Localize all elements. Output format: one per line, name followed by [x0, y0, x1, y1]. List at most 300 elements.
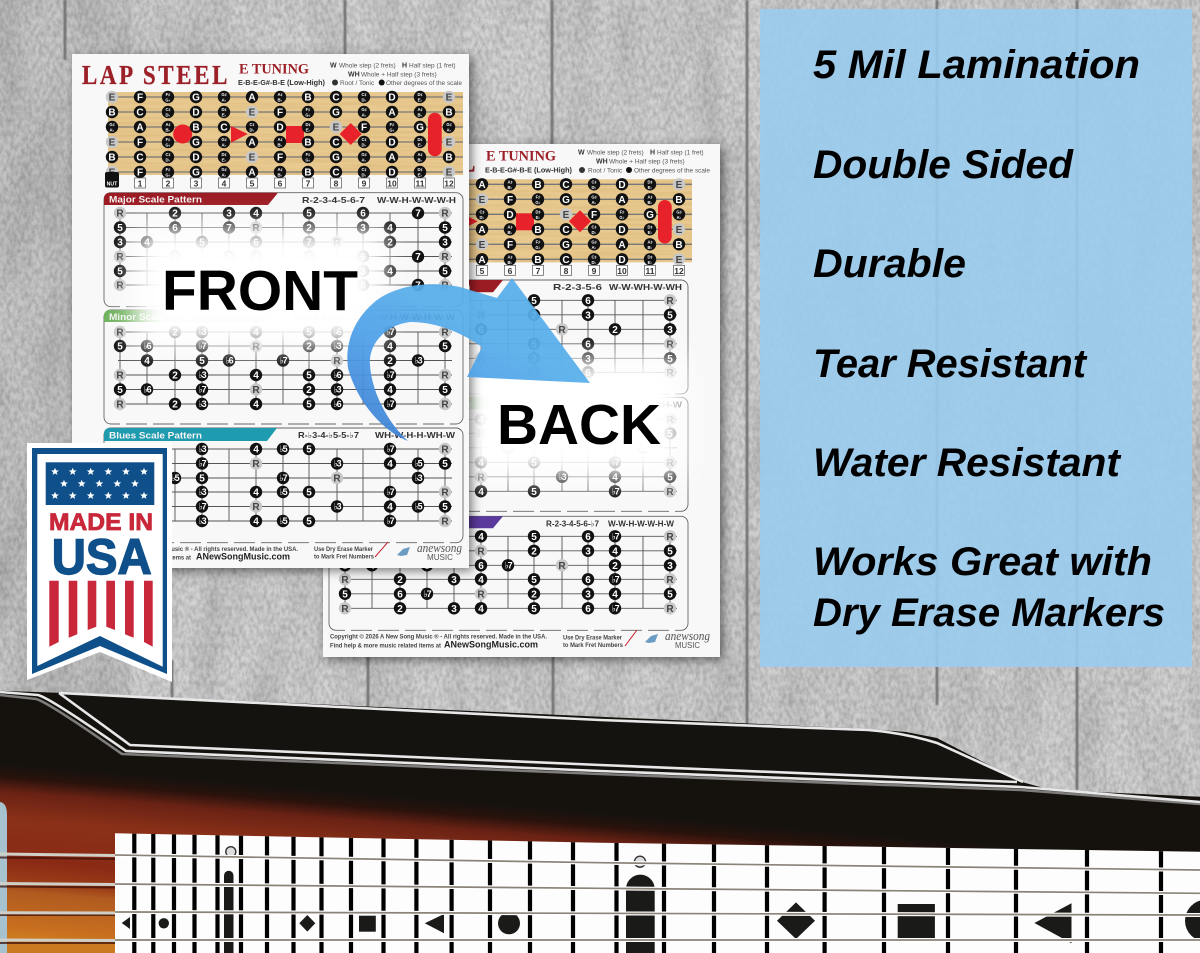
back panel: mixolydian: R	[558, 561, 566, 572]
front step legend: WH	[348, 72, 360, 78]
back panel: minor pentatonic: 5	[531, 487, 537, 498]
back fretboard diagram: B♭	[508, 185, 513, 190]
back fretboard diagram: B	[675, 240, 683, 251]
front panel: minor scale: ♭6	[334, 327, 342, 337]
back panel: mixolydian: 3	[585, 546, 591, 557]
back panel: mixolydian: 3	[585, 589, 591, 600]
front footer copyright: Copyright © 2026 A New Song Music ® - All rights reserved. Made in the USA.	[80, 545, 298, 553]
front panel: major scale: 3	[360, 266, 366, 278]
back panel: major pentatonic: R	[666, 339, 674, 350]
back panel: mixolydian: R	[477, 589, 485, 600]
front panel: major scale: 2	[306, 266, 312, 278]
front panel: blues scale: 5	[306, 516, 312, 528]
fret number boxes: 11	[416, 178, 425, 188]
front panel: minor scale: 2	[172, 328, 178, 338]
front panel: blues scale: 4	[253, 488, 259, 498]
front panel: major scale: 7	[306, 238, 312, 248]
string row E third: A♭	[222, 172, 227, 178]
string row B: B♭	[418, 112, 423, 118]
back step legend	[578, 150, 710, 174]
back panel: mixolydian: 3	[451, 575, 457, 586]
back panel: minor pentatonic: 5	[667, 429, 673, 440]
back fretboard diagram: B	[534, 180, 542, 191]
back footer copyright	[330, 632, 547, 650]
front step legend: Other degrees of the scale	[386, 80, 462, 87]
front panel: minor scale	[104, 310, 463, 424]
fret number boxes: 9	[362, 178, 367, 188]
back fretboard diagram: B♭	[648, 245, 653, 250]
string row G sharp: D♯	[305, 122, 311, 127]
front panel: major scale: 2	[172, 252, 178, 263]
back fretboard diagram: A♭	[592, 200, 597, 205]
front panel: blues scale: ♭3	[199, 444, 207, 454]
back panel: mixolydian: 5	[667, 546, 673, 557]
back panel: mixolydian: 3	[451, 604, 457, 615]
back fretboard diagram: A	[478, 255, 486, 266]
front panel: major scale: 4	[253, 280, 259, 292]
front panel: blues scale: ♭7	[387, 487, 395, 497]
back panel: mixolydian: 5	[531, 575, 537, 586]
back fretboard diagram: G	[646, 210, 654, 221]
string row E third: B	[304, 168, 312, 178]
front panel: minor scale: 5	[117, 342, 123, 352]
feature: durable: Durable	[813, 242, 966, 286]
back panel: mixolydian: R	[477, 546, 485, 557]
string row G sharp: B	[192, 122, 200, 134]
back panel: minor pentatonic: R	[666, 415, 674, 426]
back fretboard diagram: G	[562, 195, 570, 206]
string row E third: E♭	[418, 172, 422, 178]
string row E third: A♯	[277, 167, 283, 172]
back panel: major pentatonic: 6	[585, 368, 591, 379]
front panel: major scale: 7	[226, 223, 232, 234]
front dry erase note: to Mark Fret Numbers	[314, 554, 374, 560]
string row E: F	[137, 92, 143, 104]
back title: E-B-E-G#-B-E (Low-High)	[485, 168, 572, 174]
back panel: major pentatonic: 5	[531, 339, 537, 350]
back panel: mixolydian	[329, 516, 688, 630]
back panel: major pentatonic: 3	[667, 325, 673, 336]
feature: double sided: Double Sided	[813, 143, 1075, 187]
flag with stars	[46, 462, 154, 505]
front panel: blues scale: R	[252, 502, 260, 513]
back fretboard diagram: E♭	[648, 185, 652, 190]
back panel: mixolydian: 4	[369, 561, 375, 572]
back fretboard diagram: E♭	[536, 215, 540, 220]
front panel: major scale: 3	[442, 238, 448, 248]
back fretboard diagram: G♭	[535, 245, 541, 250]
string row E second: G	[192, 138, 200, 148]
back panel: mixolydian: R	[341, 575, 349, 586]
front panel: blues scale: R	[116, 444, 124, 456]
string row E third: B♭	[278, 172, 283, 178]
string row B: C	[136, 108, 144, 118]
fret number boxes: 10	[387, 178, 397, 188]
back panel: major pentatonic: R	[666, 296, 674, 307]
front panel: minor scale: R	[441, 370, 449, 382]
front panel: minor scale: 5	[306, 370, 312, 382]
back fretboard diagram: D♯	[535, 209, 541, 214]
front panel: minor scale: ♭3	[199, 370, 207, 380]
front panel: minor scale: 2	[172, 370, 178, 382]
string row E: G♭	[165, 98, 171, 102]
back footer copyright: Copyright © 2026 A New Song Music ® - All rights reserved. Made in the USA.	[330, 632, 547, 640]
back fretboard diagram: A♯	[507, 254, 513, 259]
back white glow	[460, 358, 685, 478]
front step legend: Root / Tonic	[340, 80, 375, 87]
back step legend: WH	[596, 158, 608, 166]
front panel: minor scale: 2	[306, 342, 312, 352]
front panel: major scale: 5	[117, 266, 123, 278]
curved blue arrow from front to back	[347, 278, 590, 441]
string row E second: C♯	[361, 137, 367, 142]
back fretboard diagram: A	[478, 180, 486, 191]
string row G sharp: A♯	[165, 122, 171, 127]
string row G sharp	[106, 121, 455, 134]
string row E second: F	[137, 138, 143, 148]
back fretboard diagram: 12	[674, 266, 684, 276]
front panel: minor scale: R	[116, 400, 124, 410]
guitar body and fretboard	[0, 691, 1200, 953]
string row E: A♭	[222, 98, 227, 102]
fret number boxes: 1	[138, 178, 143, 188]
fret number boxes: 5	[250, 178, 255, 188]
front panel: minor scale: ♭3	[199, 327, 207, 337]
string row B: A♭	[362, 112, 367, 118]
front panel: blues scale: ♭5	[280, 487, 288, 497]
back fretboard diagram: 6	[508, 266, 513, 276]
string row E second: E	[109, 138, 116, 148]
string row E third: F	[137, 168, 143, 178]
string row E third: G♯	[221, 167, 227, 172]
back step legend: H	[650, 150, 655, 156]
back fretboard diagram: D♭	[480, 215, 485, 220]
back title: LAP STEEL	[330, 149, 478, 178]
front panel: blues scale: ♭3	[415, 473, 423, 483]
back panel: minor pentatonic: ♭3	[640, 443, 648, 453]
back panel: major pentatonic: R	[666, 368, 674, 379]
back fretboard diagram: F	[591, 210, 597, 221]
back fretboard diagram: A	[618, 195, 626, 206]
front dry erase note	[314, 542, 388, 560]
front panel: major scale: 4	[387, 266, 393, 278]
string row E second: F♯	[166, 137, 170, 142]
front panel: major scale: R	[116, 208, 124, 220]
back panel: minor pentatonic: 4	[612, 472, 618, 483]
back panel: mixolydian: R	[666, 575, 674, 586]
string row G sharp: G♯	[109, 122, 115, 127]
back fretboard diagram: B♭	[508, 230, 513, 235]
front panel: minor scale: 5	[442, 342, 448, 352]
back fretboard diagram: F♯	[536, 239, 540, 244]
string row G sharp: D♭	[250, 128, 255, 132]
front panel: blues scale: 4	[253, 444, 259, 456]
back title: E TUNING	[486, 149, 556, 165]
back panel: major pentatonic: R-2-3-5-6	[553, 282, 603, 292]
front panel: major scale: 5	[306, 280, 312, 292]
back panel: minor pentatonic: 5	[531, 415, 537, 426]
string row E third: E	[109, 168, 116, 178]
string row E second: B	[304, 138, 312, 148]
back fretboard diagram: A♯	[507, 179, 513, 184]
back fretboard diagram: C♯	[591, 224, 597, 229]
back panel: minor pentatonic	[329, 397, 688, 511]
back step legend: Whole step (2 frets)	[587, 150, 644, 156]
fret number boxes: 6	[278, 178, 283, 188]
string row B second: F♯	[306, 152, 310, 157]
string row E third: D	[388, 168, 396, 178]
front panel: minor scale: ♭7	[387, 370, 395, 380]
back dry erase note: Use Dry Erase Marker	[563, 634, 622, 642]
back panel: mixolydian: 5	[531, 604, 537, 615]
front panel: blues scale: 4	[253, 516, 259, 528]
red position markers	[173, 113, 442, 156]
string row B second: C	[136, 152, 144, 164]
back sheet	[323, 144, 720, 657]
back panel: mixolydian: 4	[478, 532, 484, 543]
front title	[82, 61, 325, 90]
front panel: major scale: 7	[415, 252, 421, 263]
string row E: E	[109, 92, 116, 104]
back fretboard diagram: D♭	[592, 230, 597, 235]
USA text: USA	[52, 529, 152, 585]
fret number boxes: 8	[334, 178, 339, 188]
front step legend: Whole + Half step (3 frets)	[361, 72, 437, 78]
back panel: mixolydian: ♭7	[424, 589, 432, 599]
back fretboard diagram: 9	[592, 266, 597, 276]
string row B: C♯	[165, 107, 171, 112]
string row B: D♯	[221, 107, 227, 112]
front panel: blues scale: ♭3	[199, 516, 207, 526]
feature: 5 mil lamination: 5 Mil Lamination	[813, 43, 1140, 87]
fretboard position logos	[226, 847, 646, 867]
back panel: minor pentatonic: R	[477, 429, 485, 440]
front panel: major scale: 2	[387, 238, 393, 248]
front panel: minor scale: ♭3	[334, 341, 342, 351]
back fretboard diagram: B♭	[648, 200, 653, 205]
back fretboard diagram: C	[562, 255, 570, 266]
string row G sharp: D	[276, 122, 284, 134]
front panel: major scale: 7	[415, 280, 421, 292]
back fretboard diagram: F	[507, 240, 513, 251]
string row E second: C	[332, 138, 340, 148]
front panel: major scale: 6	[360, 208, 366, 220]
front panel: major scale	[104, 193, 463, 307]
back fretboard diagram: B	[675, 195, 683, 206]
back fretboard diagram: E♭	[648, 230, 652, 235]
front panel: major scale: 5	[442, 266, 448, 278]
string row B second: A♭	[362, 158, 367, 162]
back fretboard diagram	[338, 178, 692, 276]
front panel: minor scale: R-2-♭3-4-5-♭6-♭7	[293, 312, 357, 322]
front panel: major scale: 2	[172, 280, 178, 292]
string row B second: A♯	[417, 152, 423, 157]
front panel: major scale: 3	[117, 238, 123, 248]
string row E: C♯	[361, 92, 367, 97]
back panel: mixolydian: R	[341, 604, 349, 615]
string row G sharp: G♯	[446, 122, 452, 127]
front panel: blues scale: R	[441, 444, 449, 456]
back panel: major pentatonic: 2	[612, 325, 618, 336]
back fretboard diagram: G♯	[591, 239, 597, 244]
bridge cover	[0, 802, 7, 953]
string row B second	[106, 151, 455, 164]
back fretboard diagram: G♭	[535, 200, 541, 205]
back panel: major pentatonic: W-W-WH-W-WH	[609, 282, 682, 292]
front panel: minor scale: ♭7	[387, 327, 395, 337]
red stripes	[49, 581, 153, 647]
front footer copyright: ANewSongMusic.com	[196, 552, 290, 562]
front panel: major scale: 5	[442, 223, 448, 234]
front step legend: W	[330, 62, 337, 70]
string row E second: G♯	[221, 137, 227, 142]
back fretboard diagram: D♭	[592, 260, 597, 265]
back panel: mixolydian: ♭7	[612, 531, 620, 541]
back step legend: Whole + Half step (3 frets)	[609, 158, 685, 166]
front panel: minor scale: ♭6	[334, 399, 342, 409]
string row B second: B	[108, 152, 116, 164]
back fretboard diagram: G♯	[591, 194, 597, 199]
back panel: mixolydian: W-W-H-W-W-H-W	[608, 518, 674, 528]
fret number boxes	[134, 178, 454, 188]
string row B: D	[192, 108, 200, 118]
front panel: blues scale: Blues Scale Pattern	[109, 430, 202, 440]
back panel: mixolydian: 2	[397, 575, 403, 586]
front panel: minor scale: W-H-W-W-H-W-W	[378, 312, 455, 322]
string row E: A♯	[277, 92, 283, 97]
string row B: G♯	[361, 107, 367, 112]
front panel: minor scale: R	[252, 385, 260, 396]
back panel: mixolydian: 2	[531, 546, 537, 557]
back fretboard diagram: C	[562, 180, 570, 191]
back panel: mixolydian: 2	[612, 561, 618, 572]
front panel: blues scale: 5	[306, 444, 312, 456]
front panel: blues scale: R	[441, 516, 449, 528]
back panel: minor pentatonic: R	[558, 443, 566, 454]
string row B: F	[277, 108, 283, 118]
front panel: minor scale: 4	[387, 342, 393, 352]
string row B second: A	[388, 152, 396, 164]
front panel: minor scale: R	[333, 356, 341, 367]
back panel: minor pentatonic: Minor Pentatonic Scale Pattern	[334, 399, 471, 409]
front dry erase note: Use Dry Erase Marker	[314, 546, 373, 553]
back fretboard diagram: B	[534, 255, 542, 266]
back fretboard diagram: 10	[617, 266, 627, 276]
back fretboard diagram: E	[479, 240, 486, 251]
back fretboard diagram: 8	[564, 266, 569, 276]
front panel: blues scale: ♭5	[415, 502, 423, 512]
front panel: major scale: 2	[172, 208, 178, 220]
string row G sharp: B♭	[166, 128, 171, 132]
front panel: blues scale: ♭5	[280, 516, 288, 526]
string row B: A♯	[417, 107, 423, 112]
back fretboard diagram: D	[618, 255, 626, 266]
string row E: D♯	[417, 92, 423, 97]
back panel: minor pentatonic: 4	[478, 458, 484, 469]
pickguard	[59, 693, 1023, 782]
BACK label: BACK	[497, 393, 661, 457]
back panel: major pentatonic: 6	[585, 339, 591, 350]
front logo: MUSIC	[427, 553, 453, 562]
string row E third: D♯	[417, 167, 423, 172]
front footer copyright: Find help & more music related items at	[80, 554, 192, 562]
back panel: minor pentatonic: R	[666, 458, 674, 469]
back panel: major pentatonic: 2	[531, 310, 537, 321]
string row B second: D	[192, 152, 200, 164]
string row B second: G	[332, 152, 340, 164]
front panel: blues scale: ♭7	[280, 473, 288, 483]
back fretboard diagram: A♭	[676, 215, 682, 220]
front panel: blues scale: 5	[442, 459, 448, 470]
made in usa badge	[27, 443, 172, 682]
string row E third: E	[446, 168, 453, 178]
front title: LAP STEEL	[82, 61, 230, 90]
front panel: blues scale: 5	[306, 488, 312, 498]
string row B second: D♯	[221, 152, 227, 157]
front panel: major scale: 5	[306, 252, 312, 263]
string row E second: D	[388, 138, 396, 148]
back fretboard diagram: E	[676, 225, 683, 236]
back panel: major pentatonic: R	[477, 354, 485, 365]
front panel: minor scale: R	[441, 328, 449, 338]
string row E second: A♯	[277, 137, 283, 142]
front panel: major scale: W-W-H-W-W-W-H	[377, 195, 456, 205]
front panel: minor scale: R	[252, 342, 260, 352]
back panel: mixolydian: 5	[424, 561, 430, 572]
back fretboard diagram: F♯	[536, 194, 540, 199]
string row E second: D♭	[362, 142, 367, 148]
front panel: major scale: 5	[117, 223, 123, 234]
back panel: major pentatonic: 6	[478, 325, 484, 336]
front panel: major scale: R-2-3-4-5-6-7	[302, 195, 365, 205]
back panel: major pentatonic: 6	[585, 296, 591, 307]
back panel: mixolydian: 6	[585, 575, 591, 586]
string row E: D♭	[362, 98, 367, 102]
front panel: blues scale: R	[333, 474, 341, 484]
front footer copyright	[80, 545, 298, 562]
string row E second	[106, 136, 455, 148]
front panel: major scale: 6	[253, 238, 259, 248]
string row E: G	[192, 92, 200, 104]
front panel: blues scale	[104, 428, 463, 543]
string row G sharp: E	[333, 122, 340, 134]
back panel: mixolydian: 4	[612, 546, 618, 557]
string row B second: F	[277, 152, 283, 164]
string row B: A	[388, 108, 396, 118]
back panel: major pentatonic	[329, 280, 688, 394]
front panel: major scale: 6	[360, 252, 366, 263]
back fretboard diagram: A	[618, 240, 626, 251]
back step legend: Half step (1 fret)	[657, 150, 704, 156]
fret number boxes: 3	[194, 178, 199, 188]
back dry erase note: to Mark Fret Numbers	[563, 642, 623, 649]
front panel: minor scale: 5	[117, 385, 123, 396]
front panel: major scale: Major Scale Pattern	[109, 194, 202, 204]
front white glow	[135, 228, 385, 346]
back fretboard diagram: A♯	[507, 224, 513, 229]
back fretboard diagram: B	[534, 225, 542, 236]
back panel: major pentatonic: 5	[531, 296, 537, 307]
MADE IN text: MADE IN	[49, 509, 153, 536]
front panel: major scale: 5	[306, 208, 312, 220]
back panel: mixolydian: 3	[342, 561, 348, 572]
front panel: major scale: R	[441, 252, 449, 263]
string row G sharp: F♯	[390, 122, 394, 127]
front panel: blues scale: 5	[117, 459, 123, 470]
back panel: mixolydian: 2	[397, 604, 403, 615]
string row G sharp: E♭	[306, 128, 310, 132]
back dry erase note	[563, 630, 637, 649]
